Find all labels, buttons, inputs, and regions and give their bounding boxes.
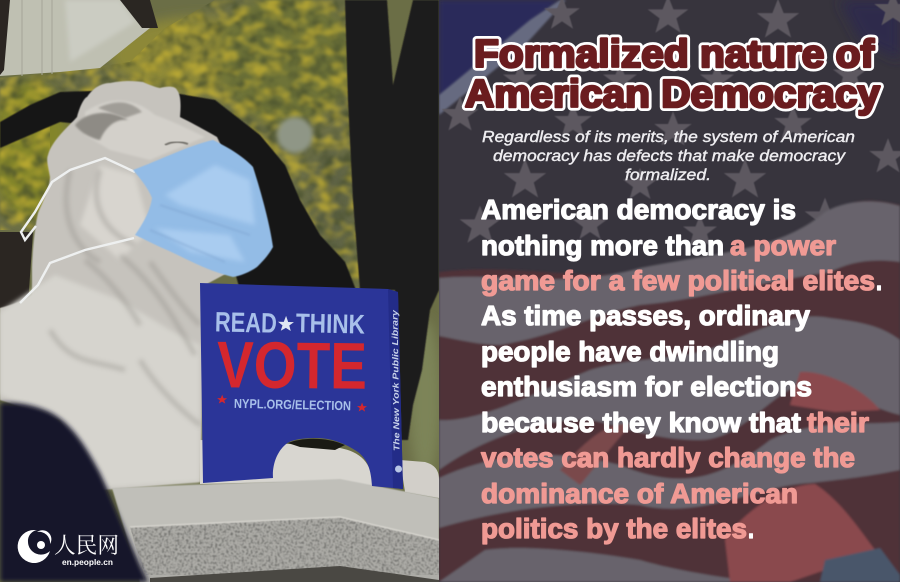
flag stars and canton xyxy=(439,0,900,582)
subtitle: formalized. xyxy=(625,167,711,184)
blurred person in foreground xyxy=(0,403,148,582)
stone pedestal xyxy=(112,479,439,582)
photo background foliage xyxy=(0,0,441,582)
left dark trunk xyxy=(0,0,33,308)
body text: . xyxy=(748,513,754,544)
body text: votes can hardly change the xyxy=(481,442,855,473)
body text: politics by the elites xyxy=(481,513,747,544)
lion right paw xyxy=(200,440,373,486)
lion statue xyxy=(0,80,225,491)
blue voting book xyxy=(200,283,403,489)
body text: nothing more than xyxy=(481,230,724,261)
lion mane folds xyxy=(50,170,200,425)
title: Formalized nature of xyxy=(474,33,875,76)
book text: read think: THINK xyxy=(296,308,366,340)
body text: dominance of American xyxy=(481,478,798,509)
body text: a power xyxy=(730,230,836,261)
panel: photo of masked lion statue xyxy=(0,0,441,582)
book text: read think: READ xyxy=(215,306,277,339)
body text: American democracy is xyxy=(481,194,796,225)
panel: flag background xyxy=(439,0,900,582)
title xyxy=(465,33,880,116)
body text: . xyxy=(876,265,882,296)
title: American Democracy xyxy=(465,73,880,116)
face mask xyxy=(133,140,273,277)
logo url: en.people.cn xyxy=(62,557,113,567)
book spine text: The New York Public Library xyxy=(390,308,401,451)
body text: people have dwindling xyxy=(481,336,779,367)
subtitle: Regardless of its merits, the system of American xyxy=(482,129,855,146)
flag stripes xyxy=(439,201,900,582)
title: Formalized nature of xyxy=(474,33,875,76)
body text: enthusiasm for elections xyxy=(481,371,812,402)
curved tree branch xyxy=(0,90,356,290)
body text: As time passes, ordinary xyxy=(481,300,810,331)
logo wordmark: 人民网 xyxy=(54,529,119,560)
body text xyxy=(481,194,882,544)
tree trunk xyxy=(345,0,439,440)
title: American Democracy xyxy=(465,73,880,116)
body text: game for a few political elites xyxy=(481,265,875,296)
book text: read think xyxy=(216,312,364,334)
building behind xyxy=(0,0,150,76)
book text: website: NYPL.ORG/ELECTION xyxy=(234,396,351,413)
body text: because they know that xyxy=(481,407,801,438)
book text: vote: VOTE xyxy=(217,327,367,403)
subtitle: democracy has defects that make democracy xyxy=(493,148,846,165)
body text: their xyxy=(807,407,869,438)
subtitle xyxy=(482,129,855,184)
mask straps xyxy=(20,158,135,303)
logo: People's Daily Online xyxy=(18,529,119,567)
